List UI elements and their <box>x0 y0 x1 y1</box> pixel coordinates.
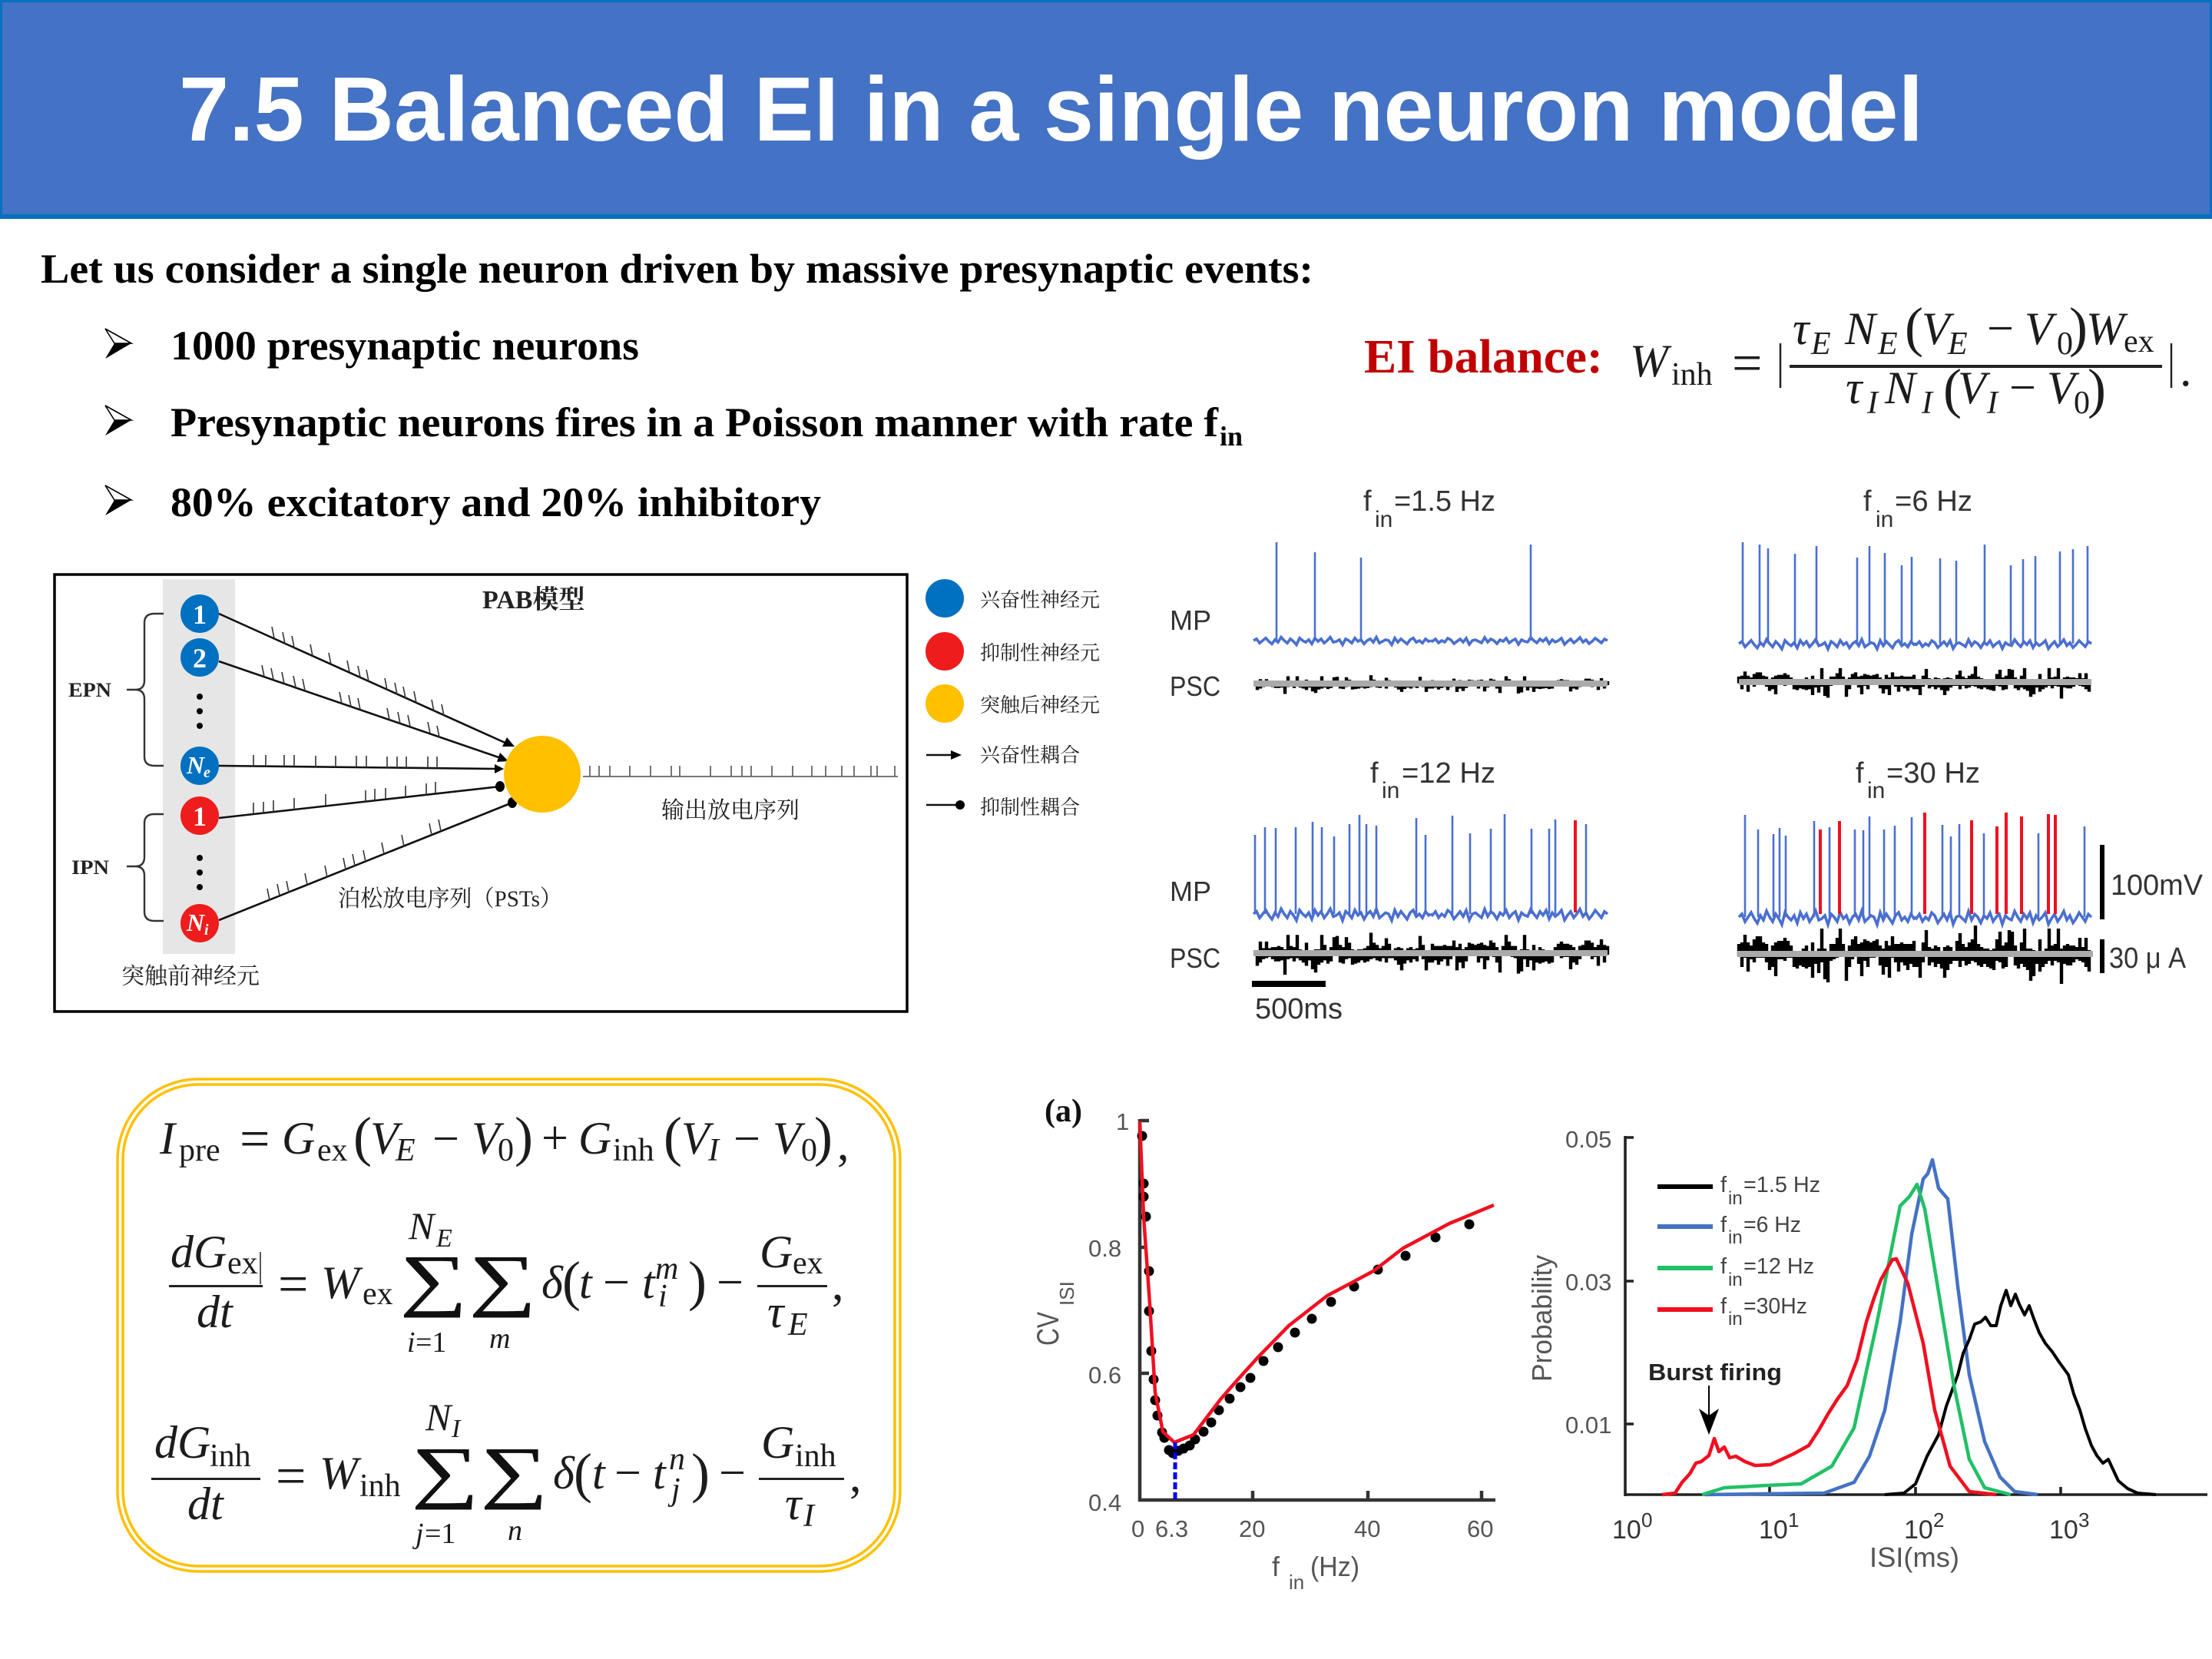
y axis title: CV <box>1031 1312 1065 1346</box>
key 1.5 Hz: =1.5 Hz <box>1743 1173 1820 1197</box>
neuron 1 excitatory: 1 <box>193 599 207 630</box>
equation: dG_inh/dt: ( <box>574 1442 592 1504</box>
equation: I_pre <box>159 1106 849 1171</box>
header banner <box>0 0 2212 217</box>
PSTs label: 泊松放电序列（PSTs） <box>338 886 562 912</box>
y tick labels: 0.8 <box>1088 1235 1121 1262</box>
panel: membrane potential traces <box>1170 485 2204 1025</box>
x tick labels: 10 <box>1904 1515 1933 1545</box>
equation: dG_inh/dt: I <box>451 1415 462 1443</box>
equation: dG_inh/dt: inh <box>795 1439 836 1474</box>
W_inh formula: ex <box>2124 324 2154 359</box>
title: 7.5 Balanced EI in a single neuron model <box>179 58 1923 161</box>
intro sentence: Let us consider a single neuron driven by massive presynaptic events: <box>41 246 1313 292</box>
black curve fin 1.5 Hz <box>1885 1290 2156 1495</box>
equation: dG_ex/dt: t <box>642 1257 656 1308</box>
neuron 1 inhibitory: 1 <box>193 801 207 832</box>
scale bar 100mV: 100mV <box>2111 869 2204 902</box>
x tick labels: 6.3 <box>1155 1515 1188 1542</box>
x tick labels: 1 <box>1788 1508 1799 1532</box>
y tick labels: 0.6 <box>1088 1362 1121 1389</box>
neuron Ni inhibitory <box>180 904 219 942</box>
x axis title: in <box>1289 1571 1304 1594</box>
equation: dG_ex/dt: ( <box>562 1250 581 1312</box>
equation: dG_inh/dt: ∑ <box>412 1434 478 1510</box>
neuron 2 excitatory: 2 <box>193 643 207 674</box>
neuron Ne excitatory <box>180 747 219 785</box>
equation: I_pre: , <box>837 1118 849 1171</box>
equation: I_pre: − <box>733 1113 760 1165</box>
connection lines <box>219 614 512 920</box>
equation: dG_ex/dt: m <box>655 1251 678 1286</box>
W_inh formula: I <box>1866 386 1879 421</box>
equation: dG_inh/dt: δ <box>553 1448 575 1498</box>
equation: dG_inh/dt: = <box>276 1447 306 1506</box>
row labels: PSC <box>1170 942 1220 974</box>
equation: I_pre: V <box>773 1113 806 1164</box>
postsynaptic neuron key: 突触后神经元 <box>980 694 1100 717</box>
equation: dG_ex/dt: δ <box>541 1257 564 1308</box>
trace: fin 12 Hz <box>1252 757 1608 1025</box>
equation: dG_ex/dt: − <box>717 1257 743 1309</box>
equation: dG_inh/dt: j <box>667 1472 680 1508</box>
x tick labels: 10 <box>1759 1515 1788 1545</box>
inhibitory coupling key <box>926 796 1080 819</box>
W_inh formula: ) <box>2069 296 2088 358</box>
equation: dG_inh/dt: τ <box>785 1479 803 1529</box>
trace: fin 6 Hz: f <box>1863 485 1872 518</box>
equation: dG_ex/dt: ) <box>688 1250 707 1312</box>
trace: fin 12 Hz: f <box>1370 757 1379 790</box>
trace: fin 1.5 Hz: in <box>1375 507 1392 532</box>
excitatory neuron key <box>926 579 1100 618</box>
EPN label: EPN <box>68 679 111 701</box>
equation: I_pre: G <box>578 1113 611 1164</box>
equation: I_pre: = <box>240 1110 270 1169</box>
EI balance equation <box>1364 296 2192 421</box>
key 12 Hz <box>1657 1254 1814 1290</box>
x tick labels: 60 <box>1467 1515 1493 1542</box>
equation: dG_ex/dt: , <box>832 1258 843 1310</box>
trace: fin 30 Hz: f <box>1856 757 1864 790</box>
row labels <box>1170 604 1220 974</box>
equation: I_pre: + <box>541 1112 568 1164</box>
equation: dG_inh/dt: j <box>412 1518 424 1550</box>
panel: conductance equations <box>118 1079 900 1571</box>
W_inh formula: ( <box>1943 358 1962 419</box>
equation: dG_ex/dt: ∑ <box>469 1242 536 1318</box>
postsynaptic neuron key <box>926 684 1100 723</box>
key 6 Hz: f <box>1720 1213 1727 1237</box>
equation: I_pre: inh <box>613 1133 654 1168</box>
minimum marker <box>1174 1442 1177 1500</box>
x tick labels: 20 <box>1239 1515 1265 1542</box>
W_inh formula: N <box>1884 363 1918 413</box>
W_inh formula <box>1630 296 2192 421</box>
axes <box>1138 1119 1495 1502</box>
callout: burst firing: Burst firing <box>1648 1359 1782 1386</box>
key 1.5 Hz: in <box>1728 1188 1743 1209</box>
equation: I_pre: ( <box>353 1106 372 1167</box>
inhibitory coupling key: 抑制性耦合 <box>980 796 1080 819</box>
equation: dG_inh/dt: N <box>425 1396 453 1439</box>
neuron 1 inhibitory <box>180 796 219 835</box>
equation: I_pre: G <box>282 1113 315 1164</box>
equation: dG_ex/dt: ex <box>363 1277 393 1312</box>
scale bar 30 uA: 30 μ A <box>2109 942 2187 975</box>
equation: dG_inh/dt: n <box>669 1442 685 1477</box>
trace: fin 30 Hz <box>1737 757 2204 984</box>
x tick labels: 10 <box>1612 1515 1641 1545</box>
y tick labels: 0.01 <box>1565 1412 1611 1439</box>
equation: I_pre: ) <box>814 1106 833 1167</box>
ellipsis dots <box>197 694 203 890</box>
trace: fin 12 Hz: =12 Hz <box>1402 757 1495 790</box>
trace: fin 30 Hz: =30 Hz <box>1886 757 1980 790</box>
output spike train <box>583 766 898 777</box>
arrow: burst firing <box>1699 1386 1719 1435</box>
W_inh formula: I <box>1921 386 1934 421</box>
trace: fin 6 Hz: =6 Hz <box>1895 485 1972 518</box>
W_inh formula: E <box>1810 326 1831 362</box>
equation: I_pre: I <box>707 1133 720 1168</box>
equation: I_pre: V <box>370 1113 403 1164</box>
x tick labels: 0 <box>1641 1508 1652 1532</box>
key 6 Hz: =6 Hz <box>1743 1213 1801 1237</box>
y axis title: Probability <box>1526 1255 1558 1382</box>
bullet 2: Presynaptic neurons fires in a Poisson manner with rate f <box>171 399 1219 445</box>
neuron Ne excitatory: e <box>204 764 210 781</box>
equation: dG_inh/dt: =1 <box>425 1518 455 1550</box>
x axis title: f <box>1272 1551 1280 1582</box>
IPN label: IPN <box>71 856 109 879</box>
equation: dG_inh/dt: n <box>508 1515 522 1547</box>
excitatory coupling key: 兴奋性耦合 <box>980 744 1080 767</box>
equation: dG_inh/dt <box>151 1396 862 1550</box>
chart: CV vs fin <box>1031 1094 1495 1594</box>
W_inh formula: I <box>1986 386 1999 421</box>
W_inh formula: − <box>2009 362 2036 414</box>
legend: ISI curves <box>1657 1173 1820 1330</box>
equation: dG_inh/dt: G <box>761 1417 794 1468</box>
x axis title: (Hz) <box>1310 1551 1359 1582</box>
equation: I_pre: − <box>432 1113 459 1165</box>
panel tag (a): (a) <box>1045 1094 1082 1129</box>
neuron Ne excitatory: N <box>186 751 206 779</box>
W_inh formula: N <box>1844 303 1878 354</box>
equation: I_pre: ( <box>664 1106 682 1167</box>
equation: dG_inh/dt: inh <box>210 1439 251 1474</box>
equation: dG_ex/dt: ex <box>793 1246 823 1281</box>
equation: dG_ex/dt: =1 <box>416 1326 446 1359</box>
row labels: PSC <box>1170 671 1220 702</box>
key 30 Hz: f <box>1720 1294 1727 1319</box>
W_inh formula: . <box>2180 344 2192 396</box>
y axis title: ISI <box>1055 1281 1078 1306</box>
equation: dG_inh/dt: t <box>653 1448 667 1498</box>
W_inh formula: V <box>1922 303 1955 354</box>
equation: I_pre: pre <box>179 1133 220 1168</box>
W_inh formula: V <box>1958 363 1991 413</box>
x tick labels: 0 <box>1131 1515 1144 1542</box>
equation: dG_ex/dt: E <box>435 1224 452 1253</box>
x axis title <box>1272 1551 1359 1594</box>
equation: I_pre: 0 <box>498 1133 514 1168</box>
x axis title: ISI(ms) <box>1869 1541 1959 1573</box>
equation: dG_ex/dt: W <box>321 1257 363 1308</box>
equation: dG_inh/dt: dt <box>187 1479 224 1529</box>
chart: ISI distribution <box>1526 1126 2207 1573</box>
excitatory neuron key: 兴奋性神经元 <box>980 589 1100 611</box>
intro text block <box>41 246 1313 525</box>
equation: dG_inh/dt: t <box>592 1448 606 1498</box>
neuron 1 excitatory <box>180 594 219 633</box>
W_inh formula: W <box>2086 303 2128 354</box>
inhibitory neuron key <box>926 632 1100 671</box>
trace: fin 1.5 Hz <box>1253 485 1608 694</box>
W_inh formula: inh <box>1671 357 1713 392</box>
W_inh formula: − <box>1987 303 2014 355</box>
bullet 3: 80% excitatory and 20% inhibitory <box>171 479 821 525</box>
x tick labels <box>1612 1508 2089 1545</box>
W_inh formula: τ <box>1793 303 1811 354</box>
equation: dG_inh/dt: ) <box>691 1442 710 1504</box>
blue curve fin 6 Hz <box>1705 1160 2038 1495</box>
neuron Ni inhibitory: i <box>204 922 209 939</box>
equation: dG_inh/dt: inh <box>359 1469 401 1504</box>
W_inh formula: 0 <box>2074 386 2090 421</box>
y axis title <box>1031 1281 1078 1346</box>
bullet 2: in <box>1220 421 1243 452</box>
brace IPN <box>127 814 164 921</box>
equation: dG_ex/dt: τ <box>767 1286 786 1337</box>
bullet 1: 1000 presynaptic neurons <box>171 323 639 369</box>
y tick labels: 0.4 <box>1088 1489 1121 1516</box>
equation: dG_ex/dt: − <box>603 1257 630 1309</box>
key 30 Hz: =30Hz <box>1743 1294 1807 1319</box>
equation: dG_ex/dt: E <box>787 1307 808 1343</box>
green curve fin 12 Hz <box>1702 1184 2011 1495</box>
x tick labels <box>1131 1515 1493 1542</box>
scale bar 500ms: 500ms <box>1255 993 1343 1025</box>
key 12 Hz: =12 Hz <box>1743 1254 1814 1279</box>
y tick labels <box>1565 1126 1611 1439</box>
key 12 Hz: in <box>1728 1270 1743 1290</box>
key 30 Hz: in <box>1728 1309 1743 1330</box>
W_inh formula: = <box>1732 334 1762 393</box>
equation: dG_ex/dt <box>169 1204 843 1359</box>
equation: I_pre: E <box>395 1133 416 1168</box>
equation: dG_inh/dt: ∑ <box>481 1434 548 1510</box>
W_inh formula: E <box>1947 326 1968 362</box>
equation: dG_inh/dt: − <box>614 1447 641 1499</box>
key 1.5 Hz: f <box>1720 1173 1727 1197</box>
equation: dG_ex/dt: ex <box>227 1246 258 1281</box>
postsynaptic neuron <box>504 736 581 813</box>
row labels: MP <box>1170 604 1211 636</box>
x tick labels: 40 <box>1354 1515 1380 1542</box>
equation: dG_ex/dt: i <box>658 1279 667 1314</box>
row labels: MP <box>1170 876 1211 907</box>
y tick labels <box>1088 1108 1129 1516</box>
equation: I_pre: V <box>681 1113 714 1164</box>
equation: I_pre: ex <box>317 1133 348 1168</box>
equation: dG_ex/dt: G <box>760 1227 793 1277</box>
W_inh formula: ( <box>1905 296 1923 358</box>
equation: I_pre: 0 <box>801 1133 817 1168</box>
presynaptic label: 突触前神经元 <box>121 964 260 989</box>
output label: 输出放电序列 <box>661 798 800 823</box>
equation: dG_ex/dt: m <box>489 1323 510 1355</box>
equation: dG_inh/dt: W <box>320 1448 362 1498</box>
equation: dG_inh/dt: − <box>719 1447 746 1499</box>
equation: dG_inh/dt: , <box>849 1450 862 1502</box>
trace: fin 6 Hz <box>1739 485 2091 698</box>
W_inh formula: ) <box>2088 358 2106 419</box>
arrowheads and inhibitory terminals <box>495 737 517 808</box>
key 30 Hz <box>1657 1294 1807 1330</box>
trace: fin 30 Hz: in <box>1867 778 1885 803</box>
brace EPN <box>127 614 164 766</box>
double rounded border <box>118 1079 900 1571</box>
W_inh formula: W <box>1630 336 1672 386</box>
key 6 Hz: in <box>1728 1227 1743 1248</box>
key 1.5 Hz <box>1657 1173 1820 1209</box>
equation: dG_ex/dt: i <box>407 1326 416 1359</box>
equation: dG_ex/dt: dG <box>171 1227 227 1277</box>
spike ticks on input lines <box>253 627 444 900</box>
key 12 Hz: f <box>1720 1254 1727 1279</box>
x tick labels: 3 <box>2078 1508 2089 1532</box>
axes <box>1625 1136 2207 1496</box>
red curve fin 30 Hz <box>1662 1259 1996 1495</box>
W_inh formula: V <box>2047 363 2080 413</box>
equation: I_pre: I <box>159 1113 177 1164</box>
trace: fin 1.5 Hz: f <box>1363 485 1372 518</box>
equation: dG_inh/dt: dG <box>154 1417 210 1468</box>
W_inh formula: τ <box>1846 363 1864 413</box>
x tick labels: 10 <box>2049 1515 2078 1545</box>
scale bar 500ms <box>1252 981 1343 1025</box>
trace: fin 1.5 Hz: =1.5 Hz <box>1394 485 1495 518</box>
W_inh formula: E <box>1877 326 1898 362</box>
inhibitory neuron key: 抑制性神经元 <box>980 642 1100 664</box>
PAB model heading: PAB模型 <box>482 585 584 614</box>
x tick labels: 2 <box>1933 1508 1944 1532</box>
equation: dG_inh/dt: I <box>803 1498 816 1534</box>
scale bar 100mV <box>2100 845 2204 919</box>
presynaptic column background <box>163 579 235 954</box>
equation: dG_ex/dt: = <box>278 1255 308 1314</box>
trace: fin 12 Hz: in <box>1382 778 1399 803</box>
key 6 Hz <box>1657 1213 1801 1248</box>
neuron 2 excitatory <box>180 638 219 677</box>
EI balance label: EI balance: <box>1364 331 1603 383</box>
equation: dG_ex/dt: N <box>408 1204 436 1247</box>
y tick labels: 0.05 <box>1565 1126 1611 1153</box>
equation: I_pre: ) <box>515 1106 533 1167</box>
trace: fin 6 Hz: in <box>1876 507 1893 532</box>
equation: dG_ex/dt: dt <box>197 1286 233 1337</box>
y tick labels: 1 <box>1116 1108 1129 1135</box>
neuron Ni inhibitory: N <box>186 909 206 936</box>
equation: dG_ex/dt: ∑ <box>400 1242 467 1318</box>
y tick labels: 0.03 <box>1565 1269 1611 1296</box>
fit curve <box>1140 1121 1494 1442</box>
equation: I_pre: V <box>472 1113 505 1164</box>
excitatory coupling key <box>926 744 1080 767</box>
legend: PAB model <box>926 579 1100 819</box>
equation: dG_ex/dt: t <box>579 1257 593 1308</box>
W_inh formula: V <box>2025 303 2058 354</box>
data dots <box>1137 1131 1475 1458</box>
panel: PAB model diagram <box>55 575 907 1012</box>
W_inh formula: 0 <box>2057 326 2073 362</box>
